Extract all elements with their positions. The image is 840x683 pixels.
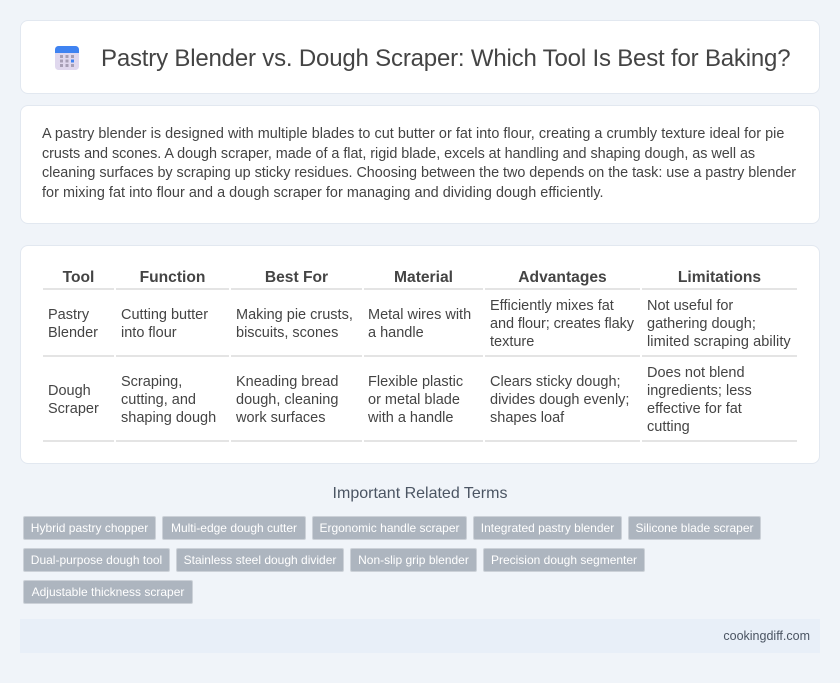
icon: calendar (55, 46, 79, 70)
row: Pastry Blender: texture (490, 334, 534, 350)
related term tags: Silicone blade scraper (635, 521, 754, 535)
row: Pastry Blender (48, 298, 791, 350)
row: Dough Scraper: dough, cleaning (236, 392, 338, 408)
footer source: cookingdiff.com (723, 629, 810, 643)
related term tags: Hybrid pastry chopper (31, 521, 148, 535)
related term tags: Ergonomic handle scraper (319, 521, 460, 535)
row: Dough Scraper: Scraping, (121, 374, 182, 390)
related term tags (23, 516, 761, 604)
row: Dough Scraper: effective for fat (647, 401, 742, 417)
row: Dough Scraper: Does not blend (647, 365, 745, 381)
intro text (42, 126, 796, 201)
row: Pastry Blender: Not useful for (647, 298, 733, 314)
row: Dough Scraper: shaping dough (121, 410, 216, 426)
row: Dough Scraper: Flexible plastic (368, 374, 463, 390)
row: Dough Scraper: ingredients; less (647, 383, 752, 399)
row: Pastry Blender: Pastry (48, 307, 89, 323)
row: Dough Scraper (48, 365, 752, 435)
column heading: Material: Material (394, 269, 453, 286)
row: Pastry Blender: limited scraping ability (647, 334, 791, 350)
row: Dough Scraper: shapes loaf (490, 410, 564, 426)
related term tags: Stainless steel dough divider (184, 553, 336, 567)
related term tags: Multi-edge dough cutter (171, 521, 297, 535)
intro text: crusts and scones. A dough scraper, made of a flat, rigid blade, excels at handling and shaping dough, as well as (42, 146, 755, 162)
related term tags: Non-slip grip blender (358, 553, 469, 567)
row: Dough Scraper: Clears sticky dough; (490, 374, 621, 390)
row: Pastry Blender: Blender (48, 325, 98, 341)
row: Dough Scraper: Dough (48, 383, 91, 399)
panel: introduction (20, 105, 820, 224)
row: Dough Scraper: cutting (647, 419, 690, 435)
row: Pastry Blender: and flour; creates flaky (490, 316, 634, 332)
related term tags: Integrated pastry blender (481, 521, 614, 535)
intro text: A pastry blender is designed with multiple blades to cut butter or fat into flour, creating a crumbly texture ideal for pie (42, 126, 784, 142)
panel: comparison table (20, 245, 820, 464)
row: Dough Scraper: Kneading bread (236, 374, 338, 390)
row: Pastry Blender: Making pie crusts, (236, 307, 353, 323)
column heading: Tool: Tool (63, 269, 94, 286)
row: Dough Scraper: Scraper (48, 401, 99, 417)
row: Pastry Blender: into flour (121, 325, 177, 341)
column heading: Function: Function (140, 269, 205, 286)
related term tags: Adjustable thickness scraper (32, 585, 184, 599)
row: Pastry Blender: Efficiently mixes fat (490, 298, 614, 314)
row: Pastry Blender: biscuits, scones (236, 325, 338, 341)
row: Dough Scraper: with a handle (368, 410, 453, 426)
title: Pastry Blender vs. Dough Scraper: Which Tool Is Best for Baking? (101, 45, 790, 72)
header card (20, 20, 820, 94)
row: Pastry Blender: a handle (368, 325, 424, 341)
column heading: Advantages: Advantages (518, 269, 607, 286)
row: Pastry Blender: gathering dough; (647, 316, 756, 332)
row: Dough Scraper: divides dough evenly; (490, 392, 629, 408)
row: Dough Scraper: cutting, and (121, 392, 196, 408)
related term tags: Dual-purpose dough tool (31, 553, 162, 567)
column heading: Limitations: Limitations (678, 269, 761, 286)
row: Dough Scraper: or metal blade (368, 392, 460, 408)
heading: Important Related Terms: Important Related Terms (333, 485, 507, 502)
row: Pastry Blender: Cutting butter (121, 307, 208, 323)
footer bar (20, 619, 820, 653)
intro text: for mixing fat into flour and a dough scraper for managing and dividing dough efficiently. (42, 185, 604, 201)
intro text: cleaning surfaces by scraping up sticky residues. Choosing between the two depends on the task: use a pastry blender (42, 165, 796, 181)
column heading: Best For: Best For (265, 269, 328, 286)
row: Pastry Blender: Metal wires with (368, 307, 471, 323)
related term tags: Precision dough segmenter (491, 553, 637, 567)
row: Dough Scraper: work surfaces (236, 410, 325, 426)
